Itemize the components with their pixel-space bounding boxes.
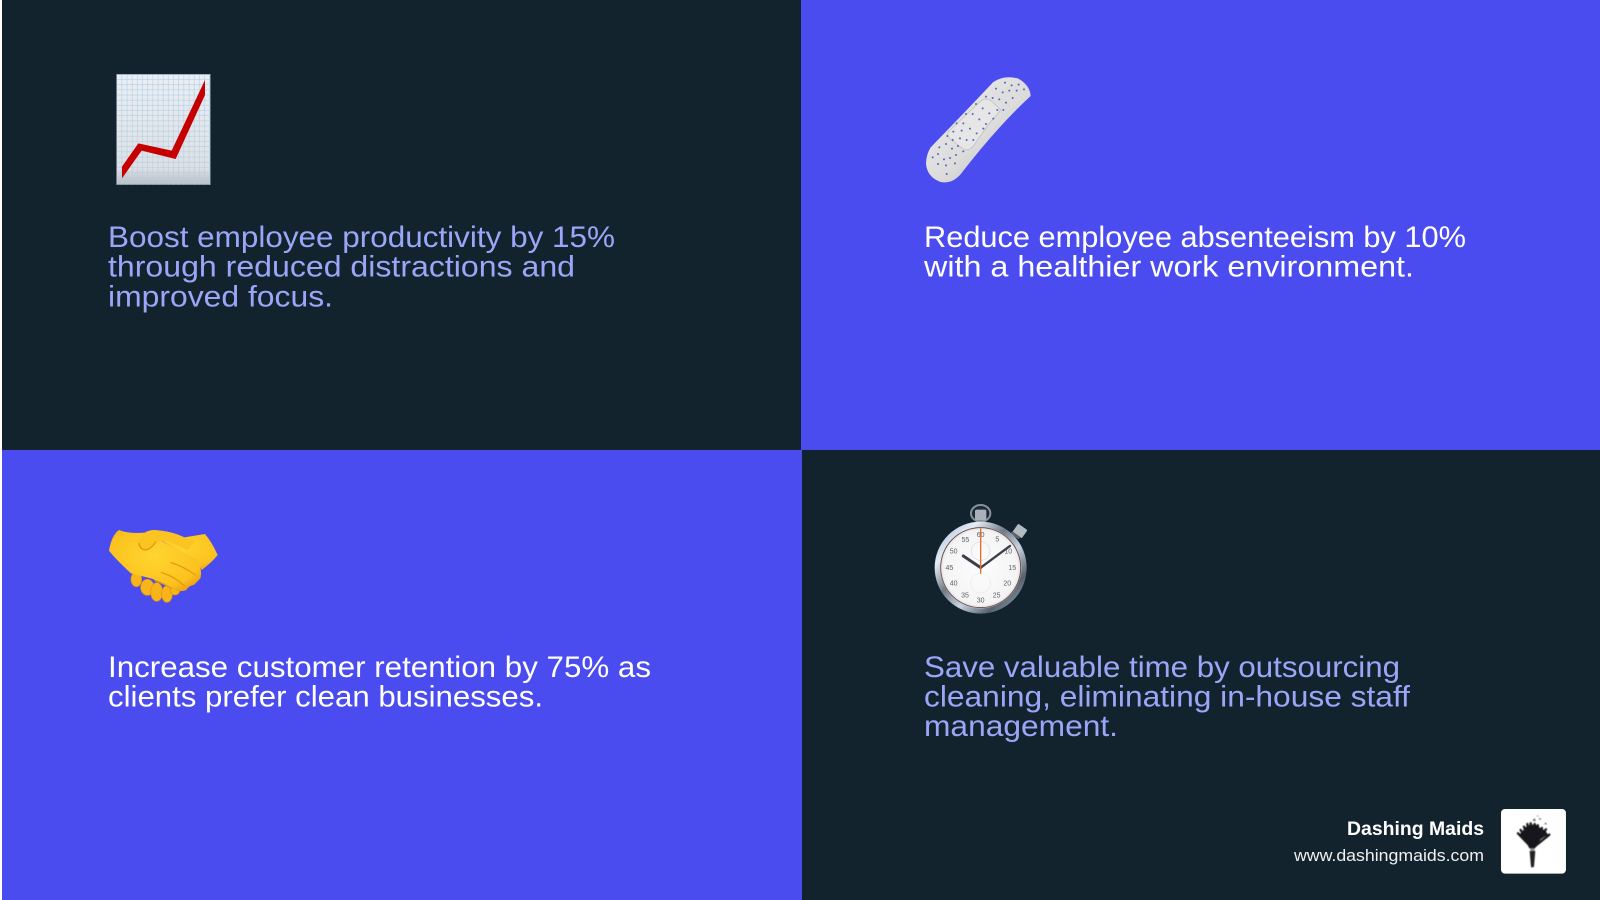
icon: stopwatch: 20 xyxy=(1003,581,1011,588)
icon: stopwatch: 10 xyxy=(1004,549,1012,556)
panel: reduce absenteeism xyxy=(801,0,1600,450)
text: absenteeism benefit: Reduce employee absenteeism by 10% xyxy=(924,221,1466,254)
text: absenteeism benefit: with a healthier work environment. xyxy=(923,250,1414,284)
website url: www.dashingmaids.com xyxy=(1293,846,1484,865)
text: retention benefit: clients prefer clean businesses. xyxy=(108,680,543,714)
text: time saving benefit: Save valuable time by outsourcing xyxy=(924,651,1400,684)
icon: stopwatch: 30 xyxy=(977,598,985,605)
panel: save time xyxy=(802,450,1600,900)
logo: feather duster xyxy=(1501,809,1566,874)
icon: stopwatch: 15 xyxy=(1008,565,1016,572)
brand name: Dashing Maids xyxy=(1347,819,1484,840)
text: productivity benefit: through reduced distractions and xyxy=(108,250,575,284)
icon: stopwatch: 40 xyxy=(950,581,958,588)
text: time saving benefit: management. xyxy=(924,710,1118,743)
icon: rising chart xyxy=(117,74,210,185)
text: retention benefit: Increase customer retention by 75% as xyxy=(108,651,651,684)
icon: stopwatch: 25 xyxy=(993,592,1001,599)
text: time saving benefit: cleaning, eliminating in-house staff xyxy=(924,680,1411,714)
panel: boost productivity xyxy=(2,0,801,450)
icon: stopwatch: 5 xyxy=(995,536,999,543)
icon: stopwatch: 45 xyxy=(945,565,953,572)
icon: handshake xyxy=(109,530,218,602)
text: productivity benefit: Boost employee productivity by 15% xyxy=(108,221,615,254)
icon: stopwatch: 60 xyxy=(977,532,985,539)
icon: stopwatch xyxy=(937,505,1027,611)
icon: stopwatch: 50 xyxy=(950,549,958,556)
text: productivity benefit: improved focus. xyxy=(108,280,333,314)
icon: adhesive bandage xyxy=(926,77,1031,182)
icon: stopwatch: 35 xyxy=(961,592,969,599)
panel: customer retention xyxy=(2,450,802,900)
icon: stopwatch: 55 xyxy=(961,537,969,544)
